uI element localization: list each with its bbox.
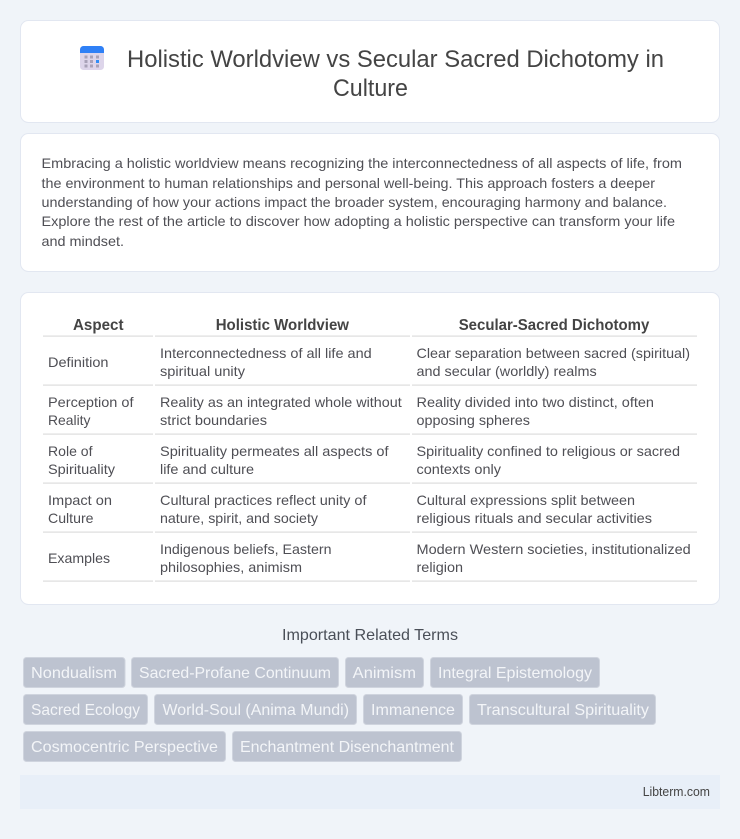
tag: cosmocentric perspective: Cosmocentric Perspective	[31, 739, 218, 756]
panel: comparison table	[20, 292, 720, 604]
intro paragraph: the environment to human relationships and personal well-being. This approach fosters a deeper	[42, 175, 655, 191]
tag: cosmocentric perspective	[24, 732, 226, 762]
tag: sacred ecology	[24, 694, 148, 724]
row: perception of reality: Reality divided into two distinct, often	[416, 394, 654, 410]
row: impact on culture: Cultural expressions split between	[416, 492, 635, 508]
tag: enchantment disenchantment	[232, 732, 462, 762]
row: perception of reality: opposing spheres	[416, 412, 530, 428]
title: Culture	[333, 75, 408, 102]
related terms tags	[24, 658, 656, 762]
tag: animism: Animism	[353, 665, 416, 682]
title	[127, 46, 664, 102]
row: perception of reality	[43, 394, 697, 435]
row: impact on culture: nature, spirit, and society	[160, 510, 318, 526]
row: role of spirituality: Spirituality	[48, 461, 115, 477]
row: examples: religion	[416, 559, 463, 575]
row: role of spirituality	[43, 443, 697, 484]
row: role of spirituality: Spirituality permeates all aspects of	[160, 443, 389, 459]
row: role of spirituality: Spirituality confined to religious or sacred	[416, 443, 680, 459]
tag: sacred-profane continuum	[132, 658, 338, 688]
row: role of spirituality: Role of	[48, 443, 93, 459]
row: definition: Clear separation between sacred (spiritual)	[416, 345, 690, 361]
title: Holistic Worldview vs Secular Sacred Dichotomy in	[127, 46, 664, 73]
table header row	[43, 317, 697, 337]
row: role of spirituality: contexts only	[416, 461, 501, 477]
row: examples	[43, 541, 697, 582]
tag: transcultural spirituality: Transcultural Spirituality	[477, 702, 649, 719]
intro paragraph: Embracing a holistic worldview means recognizing the interconnectedness of all aspects of life, from	[42, 155, 682, 171]
row: perception of reality: Perception of	[48, 394, 134, 410]
icon: calendar	[80, 46, 104, 70]
footer bar: Libterm.com	[643, 785, 710, 799]
tag: nondualism: Nondualism	[31, 665, 117, 682]
row: perception of reality: Reality as an integrated whole without	[160, 394, 402, 410]
tag: nondualism	[24, 658, 125, 688]
row: perception of reality: strict boundaries	[160, 412, 267, 428]
table header row: Aspect	[73, 317, 124, 334]
intro paragraph	[42, 155, 682, 249]
row: impact on culture	[43, 492, 697, 533]
tag: transcultural spirituality	[470, 694, 656, 724]
tag: sacred ecology: Sacred Ecology	[31, 702, 140, 719]
tag: enchantment disenchantment: Enchantment Disenchantment	[240, 739, 455, 756]
intro paragraph: and mindset.	[42, 233, 124, 249]
footer bar	[20, 775, 720, 809]
panel: title header	[20, 20, 720, 122]
row: examples: Modern Western societies, institutionalized	[416, 541, 691, 557]
table header row: Holistic Worldview	[216, 317, 350, 334]
row: examples: Indigenous beliefs, Eastern	[160, 541, 332, 557]
tag: animism	[346, 658, 424, 688]
tag: integral epistemology	[430, 658, 600, 688]
row: impact on culture: Culture	[48, 510, 94, 526]
tag: immanence: Immanence	[371, 702, 455, 719]
row: definition: spiritual unity	[160, 363, 245, 379]
row: definition: Definition	[48, 354, 108, 370]
tag: world-soul	[154, 694, 356, 724]
row: impact on culture: religious rituals and secular activities	[416, 510, 652, 526]
table header row: Secular-Sacred Dichotomy	[459, 317, 649, 334]
heading: important related terms: Important Related Terms	[282, 627, 458, 644]
panel: introduction	[20, 134, 720, 272]
tag: immanence	[364, 694, 462, 724]
tag: sacred-profane continuum: Sacred-Profane Continuum	[139, 665, 331, 682]
row: impact on culture: Cultural practices reflect unity of	[160, 492, 367, 508]
tag: integral epistemology: Integral Epistemology	[438, 665, 592, 682]
row: impact on culture: Impact on	[48, 492, 112, 508]
tag: world-soul: World-Soul (Anima Mundi)	[162, 702, 349, 719]
row: perception of reality: Reality	[48, 412, 90, 428]
row: role of spirituality: life and culture	[160, 461, 254, 477]
row: definition: and secular (worldly) realms	[416, 363, 597, 379]
intro paragraph: Explore the rest of the article to discover how adopting a holistic perspective can transform your life	[42, 213, 675, 229]
row: definition	[43, 345, 697, 386]
row: examples: Examples	[48, 550, 110, 566]
row: definition: Interconnectedness of all life and	[160, 345, 372, 361]
intro paragraph: understanding of how your actions impact the broader system, encouraging harmony and balance.	[42, 194, 667, 210]
row: examples: philosophies, animism	[160, 559, 302, 575]
